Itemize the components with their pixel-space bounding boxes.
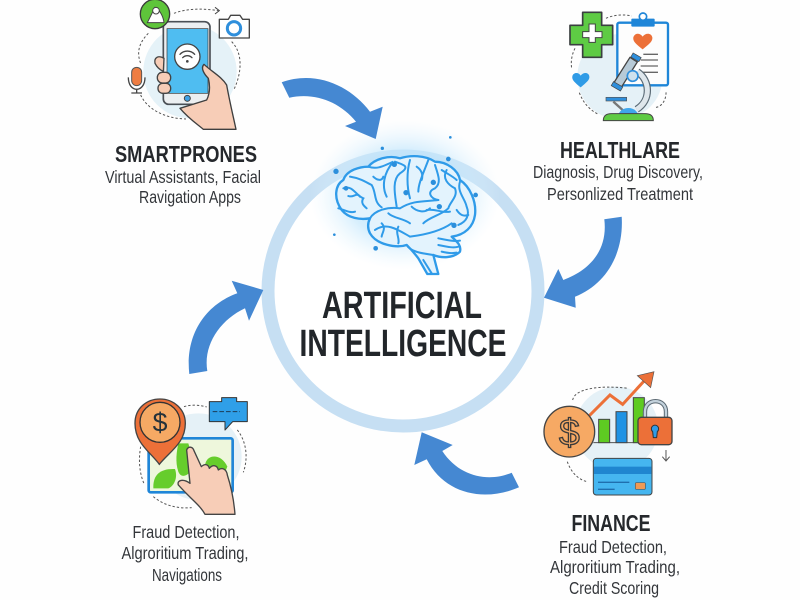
title: artificial intelligence xyxy=(300,285,506,365)
arrow: navigation to center xyxy=(189,281,263,374)
central ring xyxy=(268,156,538,426)
icon: glowing brain xyxy=(310,120,500,274)
icon: finance xyxy=(544,372,672,495)
heading: finance: FINANCE xyxy=(572,510,650,536)
text: finance line 2: Algroritium Trading, xyxy=(550,557,680,577)
heading: healthcare: HEALTHLARE xyxy=(560,137,680,163)
text: healthcare line 2: Personlized Treatment xyxy=(547,184,693,204)
arrow: finance to center xyxy=(414,432,519,495)
heading: smartphones: SMARTPRONES xyxy=(115,141,257,167)
arrow: smartphones to center xyxy=(282,78,383,139)
text: healthcare line 1: Diagnosis, Drug Discovery, xyxy=(533,162,703,182)
text: finance line 1: Fraud Detection, xyxy=(559,537,667,557)
text: navigation line 2: Algroritium Trading, xyxy=(122,543,248,563)
icon: navigation tablet: $ xyxy=(153,408,168,438)
icon: finance: $ xyxy=(559,411,580,453)
text: smartphones line 2: Ravigation Apps xyxy=(139,187,241,207)
text: finance line 3: Credit Scoring xyxy=(569,578,659,598)
icon: healthcare xyxy=(570,12,668,121)
text: navigation line 1: Fraud Detection, xyxy=(132,522,240,542)
arrow: healthcare to center xyxy=(544,217,622,308)
title: artificial intelligence: ARTIFICIAL xyxy=(322,285,482,327)
neural nodes xyxy=(333,136,478,251)
text: smartphones line 1: Virtual Assistants, Facial xyxy=(105,167,261,187)
icon: navigation tablet xyxy=(135,398,247,514)
brain folds xyxy=(338,160,468,273)
title: artificial intelligence: INTELLIGENCE xyxy=(300,323,506,365)
icon: smartphone xyxy=(128,0,249,129)
text: navigation line 3: Navigations xyxy=(152,565,222,585)
